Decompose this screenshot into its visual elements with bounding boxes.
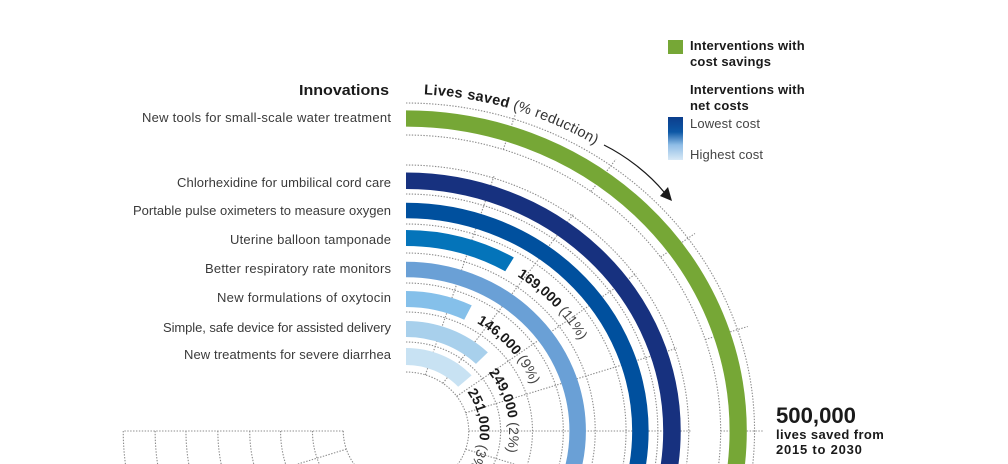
innovation labels: Better respiratory rate monitors — [205, 261, 392, 276]
innovation labels: Simple, safe device for assisted delivery — [163, 320, 392, 335]
legend: Interventions with — [690, 82, 805, 97]
value label: 169,000: 169,000 (11%) — [518, 270, 587, 340]
value label: 146,000: 146,000 (9%) — [477, 316, 540, 384]
radial chart — [122, 102, 763, 464]
legend: Lowest cost — [690, 116, 760, 131]
innovation labels: New formulations of oxytocin — [217, 290, 391, 305]
bar: chlorhexidine — [406, 181, 672, 464]
chart grid — [123, 103, 763, 464]
arrow — [604, 145, 672, 201]
innovation labels: Chlorhexidine for umbilical cord care — [177, 175, 391, 190]
innovation labels — [133, 110, 392, 362]
legend gradient: net costs — [668, 117, 683, 160]
innovation labels: Uterine balloon tamponade — [230, 232, 391, 247]
legend — [668, 38, 805, 162]
innovation labels: New treatments for severe diarrhea — [184, 347, 392, 362]
bar: small-scale water treatment — [406, 118, 738, 464]
legend: Highest cost — [690, 147, 763, 162]
bar: uterine balloon tamponade — [406, 238, 510, 264]
bar: pulse oximeters — [406, 210, 640, 464]
callout: 500,000 lives saved: lives saved from — [776, 427, 884, 442]
legend: net costs — [690, 98, 749, 113]
innovation labels: New tools for small-scale water treatment — [142, 110, 391, 125]
heading: lives saved: Lives saved (% reduction) — [424, 84, 598, 146]
bars — [406, 118, 738, 464]
legend: Interventions with — [690, 38, 805, 53]
callout: 500,000 lives saved: 2015 to 2030 — [776, 442, 862, 457]
legend: cost savings — [690, 54, 771, 69]
legend swatch: cost savings — [668, 40, 683, 54]
bar: respiratory rate monitors — [406, 270, 578, 464]
callout: 500,000 lives saved: 500,000 — [776, 403, 856, 428]
heading: innovations: Innovations — [299, 82, 389, 99]
bar: assisted delivery device — [406, 329, 482, 358]
bar: severe diarrhea treatments — [406, 356, 465, 381]
callout: 500,000 lives saved — [776, 403, 884, 457]
bar: formulations of oxytocin — [406, 299, 468, 313]
value label: 249,000: 249,000 (2%) — [488, 368, 520, 452]
innovation labels: Portable pulse oximeters to measure oxygen — [133, 203, 391, 218]
